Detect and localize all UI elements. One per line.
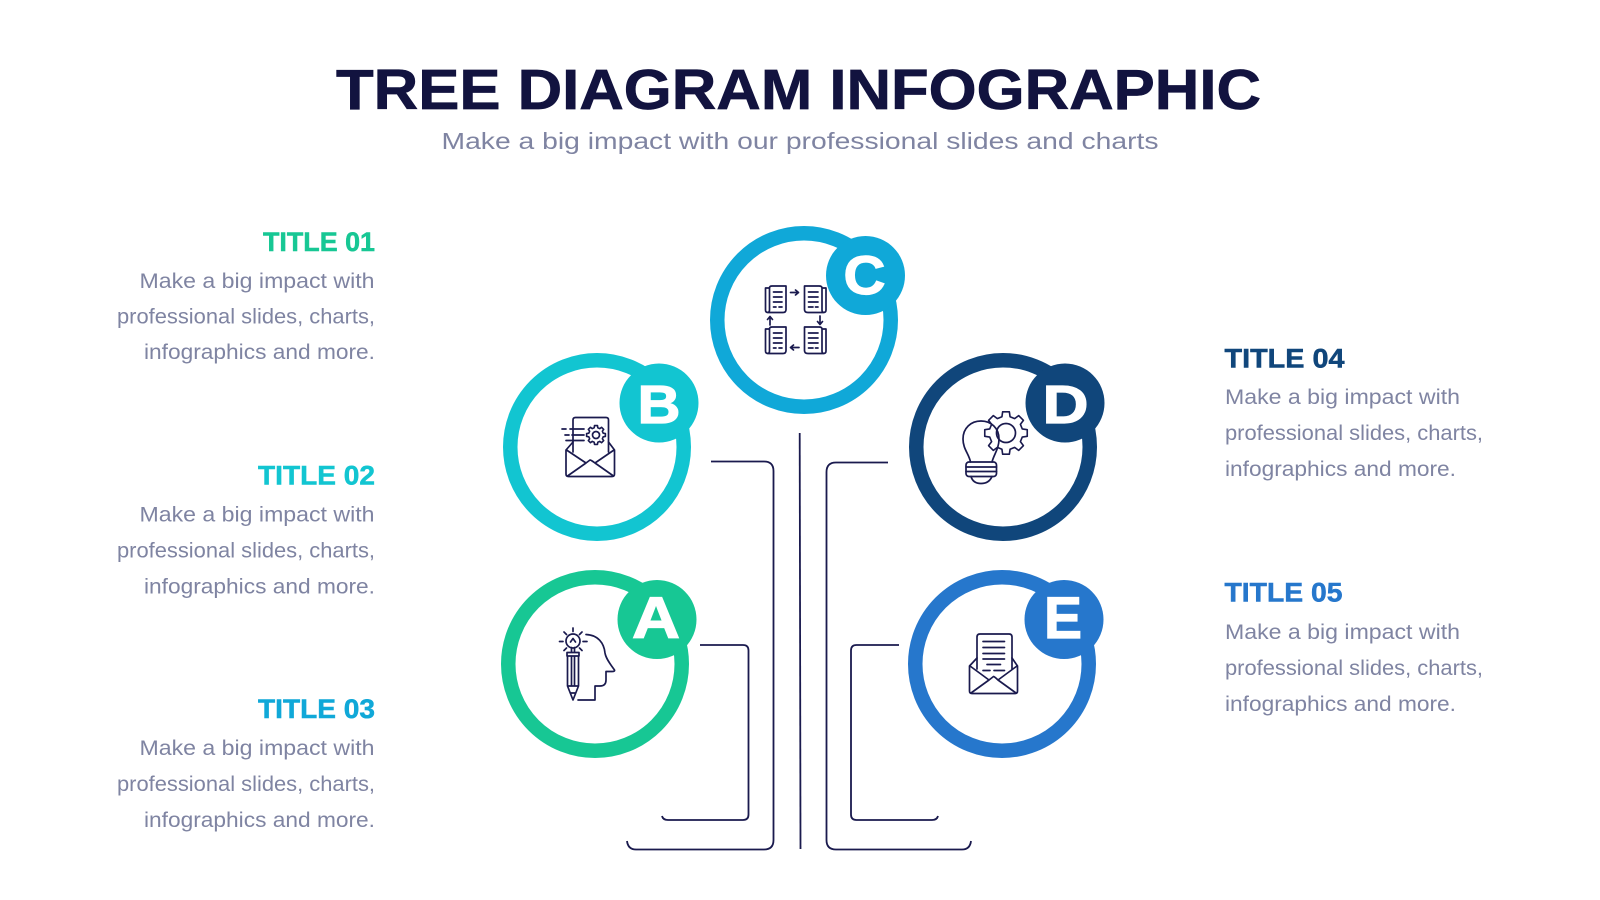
body: title 04: professional slides, charts, (1225, 421, 1483, 445)
heading: title 05: TITLE 05 (1224, 578, 1342, 608)
badge C (826, 236, 905, 315)
icon: bulb and gear (963, 412, 1027, 484)
ring C (717, 233, 891, 407)
tree branches (627, 433, 971, 850)
node D (916, 360, 1104, 534)
badge C: C (844, 244, 886, 306)
body: title 03: professional slides, charts, (117, 772, 375, 796)
body: title 03 (117, 736, 375, 832)
text block: title 02 (117, 460, 375, 598)
body: title 02: infographics and more. (144, 574, 375, 598)
heading: title 02: TITLE 02 (258, 460, 375, 490)
icon: head with bulb and pencil (560, 628, 615, 700)
body: title 02: professional slides, charts, (117, 538, 375, 562)
badge B (620, 364, 698, 442)
ring D (916, 360, 1090, 534)
badge B: B (638, 375, 680, 435)
icon: envelope with letter (970, 634, 1018, 694)
node B (510, 360, 698, 534)
heading: title 04: TITLE 04 (1224, 344, 1345, 374)
badge E: E (1044, 586, 1082, 651)
badge A (618, 580, 696, 659)
body: title 05: infographics and more. (1225, 692, 1456, 716)
title: TREE DIAGRAM INFOGRAPHIC (336, 58, 1261, 122)
heading: title 03: TITLE 03 (258, 694, 375, 724)
body: title 01 (117, 269, 375, 364)
badge E (1024, 580, 1104, 659)
body: title 03: infographics and more. (144, 808, 375, 832)
text block: title 03 (117, 694, 375, 832)
body: title 01: professional slides, charts, (117, 304, 375, 328)
body: title 01: Make a big impact with (140, 269, 374, 293)
ring E (915, 577, 1089, 751)
body: title 02 (117, 502, 375, 598)
subtitle: Make a big impact with our professional slides and charts (442, 128, 1158, 154)
ring A (508, 577, 682, 751)
body: title 05: Make a big impact with (1225, 620, 1460, 644)
text block: title 05 (1224, 578, 1483, 716)
heading: title 01: TITLE 01 (263, 227, 375, 257)
body: title 05 (1225, 620, 1483, 716)
body: title 04: Make a big impact with (1225, 385, 1460, 409)
body: title 04: infographics and more. (1225, 457, 1456, 481)
icon: envelope with gear document (562, 418, 614, 476)
body: title 05: professional slides, charts, (1225, 656, 1483, 680)
icon: documents cycle (766, 286, 826, 354)
node C (717, 233, 905, 407)
node A (508, 577, 696, 751)
text block: title 04 (1224, 344, 1483, 481)
body: title 03: Make a big impact with (140, 736, 374, 760)
badge A: A (632, 586, 680, 651)
ring B (510, 360, 684, 534)
body: title 02: Make a big impact with (140, 502, 374, 526)
badge D: D (1042, 375, 1088, 435)
text block: title 01 (117, 227, 375, 364)
body: title 01: infographics and more. (144, 340, 375, 364)
node E (915, 577, 1104, 751)
badge D (1026, 364, 1104, 442)
body: title 04 (1225, 385, 1483, 481)
